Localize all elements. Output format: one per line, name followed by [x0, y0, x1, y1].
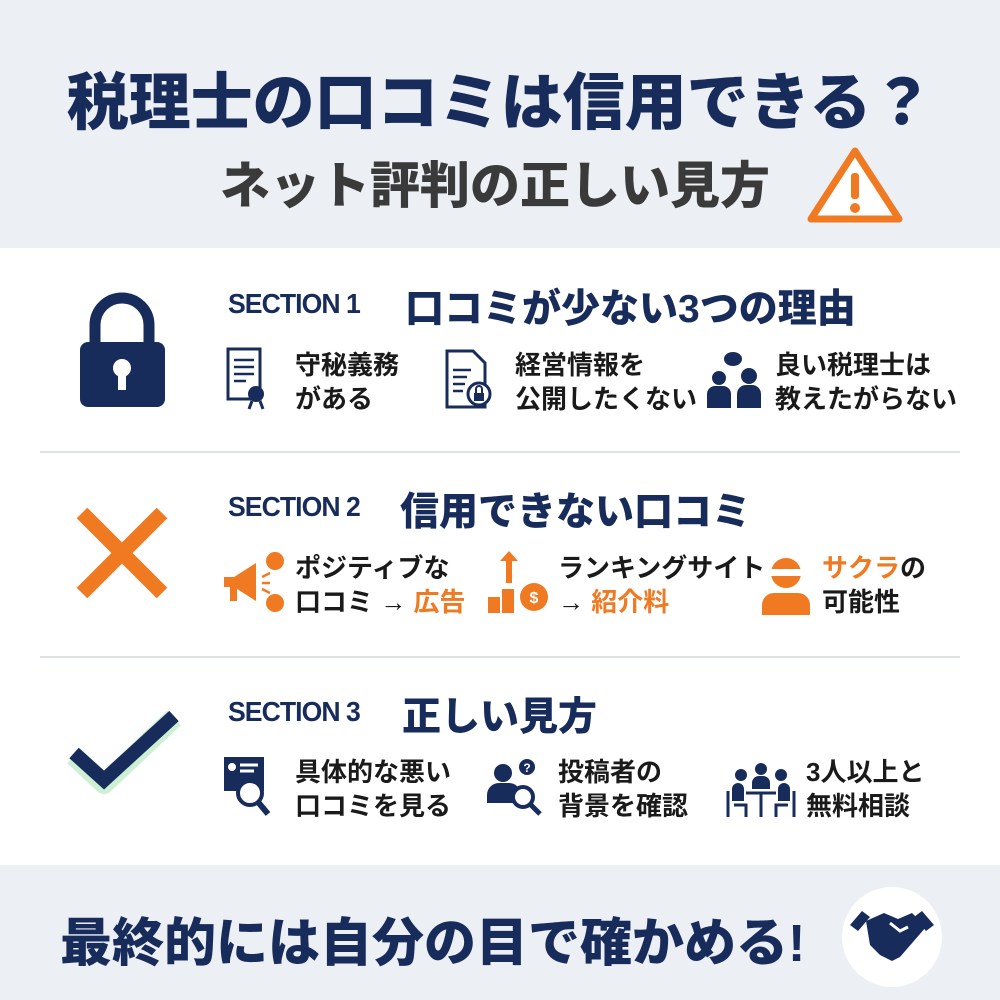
item 1 — [224, 552, 465, 617]
heading: SECTION 1 — [228, 288, 360, 319]
heading: SECTION 2 — [228, 491, 360, 522]
item 3: 可能性 — [822, 587, 900, 617]
section 2: 信用できない口コミ — [400, 491, 751, 534]
footer message: 最終的には自分の目で確かめる! — [60, 915, 805, 973]
icon: check — [67, 710, 181, 794]
item 3: 無料相談 — [806, 791, 910, 821]
footer band — [0, 865, 1000, 1000]
subtitle: ネット評判の正しい見方 — [220, 158, 770, 214]
item 2: ? — [523, 761, 531, 775]
item 1: 口コミ → 広告 — [295, 587, 465, 617]
icon: lock — [80, 292, 165, 407]
item 3 — [726, 757, 924, 821]
item 2 — [488, 551, 765, 617]
section 3: 正しい見方 — [402, 696, 597, 739]
item 3 — [707, 350, 957, 414]
item 2 — [487, 757, 688, 821]
section 1 — [80, 287, 957, 414]
item 1: がある — [295, 384, 373, 414]
item 2: 公開したくない — [515, 384, 697, 414]
header band — [0, 0, 1000, 248]
item 2: → 紹介料 — [558, 587, 669, 617]
section 3 — [67, 696, 924, 821]
item 1 — [224, 757, 451, 821]
title: 税理士の口コミは信用できる？ — [67, 69, 933, 138]
icon: warning — [808, 148, 902, 222]
heading: SECTION 3 — [228, 696, 360, 727]
icon: handshake — [842, 887, 942, 987]
item 3: 教えたがらない — [775, 384, 957, 414]
item 2: $ — [530, 590, 539, 607]
icon: X — [76, 508, 168, 598]
item 1 — [226, 348, 399, 414]
item 2: ランキングサイト — [558, 553, 765, 583]
item 3 — [762, 553, 926, 617]
item 2: 投稿者の — [558, 757, 662, 787]
item 2: 経営情報を — [515, 350, 645, 380]
item 1: ポジティブな — [295, 553, 449, 583]
item 2: 背景を確認 — [558, 791, 688, 821]
item 3: 良い税理士は — [775, 350, 931, 380]
item 2 — [446, 350, 697, 414]
item 1: 口コミを見る — [295, 791, 451, 821]
section 1: 口コミが少ない3つの理由 — [405, 288, 856, 331]
item 3: 3人以上と — [806, 757, 924, 787]
item 1: 守秘義務 — [295, 350, 399, 380]
item 3: サクラの — [822, 553, 926, 583]
item 1: 具体的な悪い — [295, 757, 451, 787]
section 2 — [76, 491, 926, 617]
